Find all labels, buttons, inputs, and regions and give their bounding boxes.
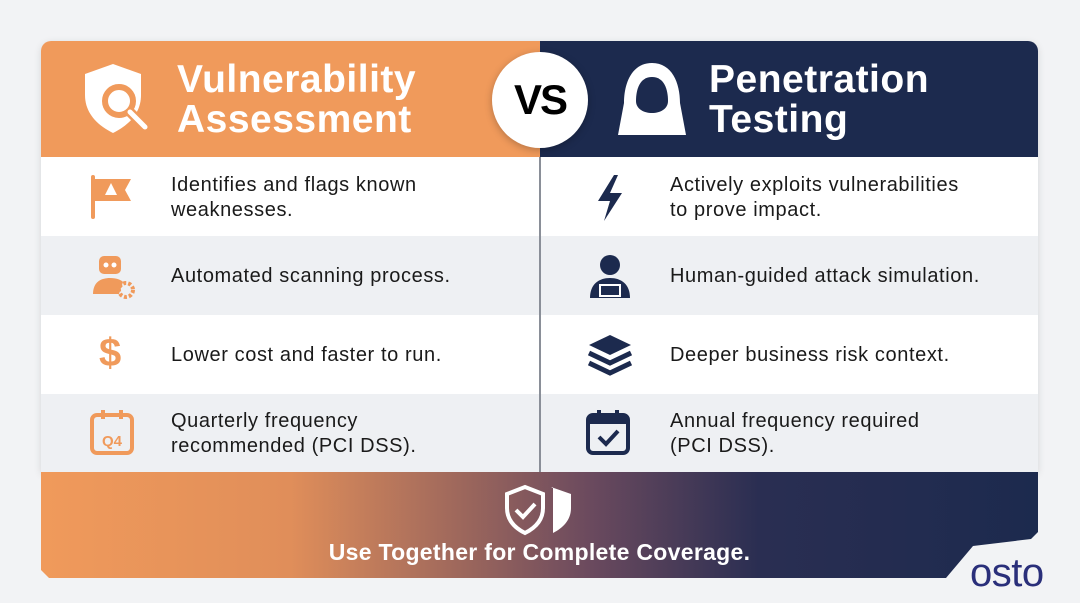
icon: lightning	[598, 175, 622, 221]
left row 3: Lower cost and faster to run.	[171, 344, 442, 366]
VS circle	[492, 52, 588, 148]
title right	[709, 58, 929, 141]
icon: person laptop	[590, 255, 630, 298]
icon: calendar Q4: Q4	[102, 433, 123, 450]
icon: layers	[588, 335, 632, 376]
icon: dollar: $	[99, 331, 121, 375]
right row 4: Annual frequency required	[670, 410, 920, 432]
icon: robot gear	[93, 256, 135, 299]
bottom banner	[41, 472, 1038, 578]
left row 1	[91, 174, 417, 221]
left row 4: recommended (PCI DSS).	[171, 435, 416, 457]
logo: osto: osto	[970, 551, 1044, 595]
right row 3: Deeper business risk context.	[670, 344, 950, 366]
icon: hooded hacker	[618, 63, 686, 135]
left row 4: Quarterly frequency	[171, 410, 358, 432]
header: penetration testing	[540, 41, 1038, 157]
title right: Testing	[709, 98, 848, 141]
right row 2: Human-guided attack simulation.	[670, 265, 980, 287]
left row 2: Automated scanning process.	[171, 265, 451, 287]
right row 3	[588, 335, 950, 376]
title left	[177, 58, 416, 141]
right row 1: to prove impact.	[670, 199, 822, 221]
title left: Assessment	[177, 98, 412, 141]
left row 3	[99, 331, 442, 375]
right row 1	[598, 174, 959, 221]
left row 1: weaknesses.	[171, 199, 293, 221]
left row 2	[93, 256, 451, 299]
icon: calendar Q4	[90, 410, 134, 455]
icon: double shield	[505, 484, 571, 536]
rows	[41, 157, 1038, 236]
right row 4	[586, 410, 920, 457]
card	[41, 41, 1038, 472]
header: vulnerability assessment	[41, 41, 540, 157]
right row 1: Actively exploits vulnerabilities	[670, 174, 959, 196]
left row 4	[90, 410, 416, 457]
VS circle: VS	[514, 76, 566, 123]
icon: shield with magnifier	[85, 64, 148, 133]
title right: Penetration	[709, 58, 929, 101]
icon: flag	[91, 175, 131, 219]
banner text: Use Together for Complete Coverage.	[329, 539, 750, 565]
left row 1: Identifies and flags known	[171, 174, 417, 196]
right row 2	[590, 255, 980, 298]
right row 4: (PCI DSS).	[670, 435, 775, 457]
icon: calendar check	[586, 410, 630, 455]
title left: Vulnerability	[177, 58, 416, 101]
